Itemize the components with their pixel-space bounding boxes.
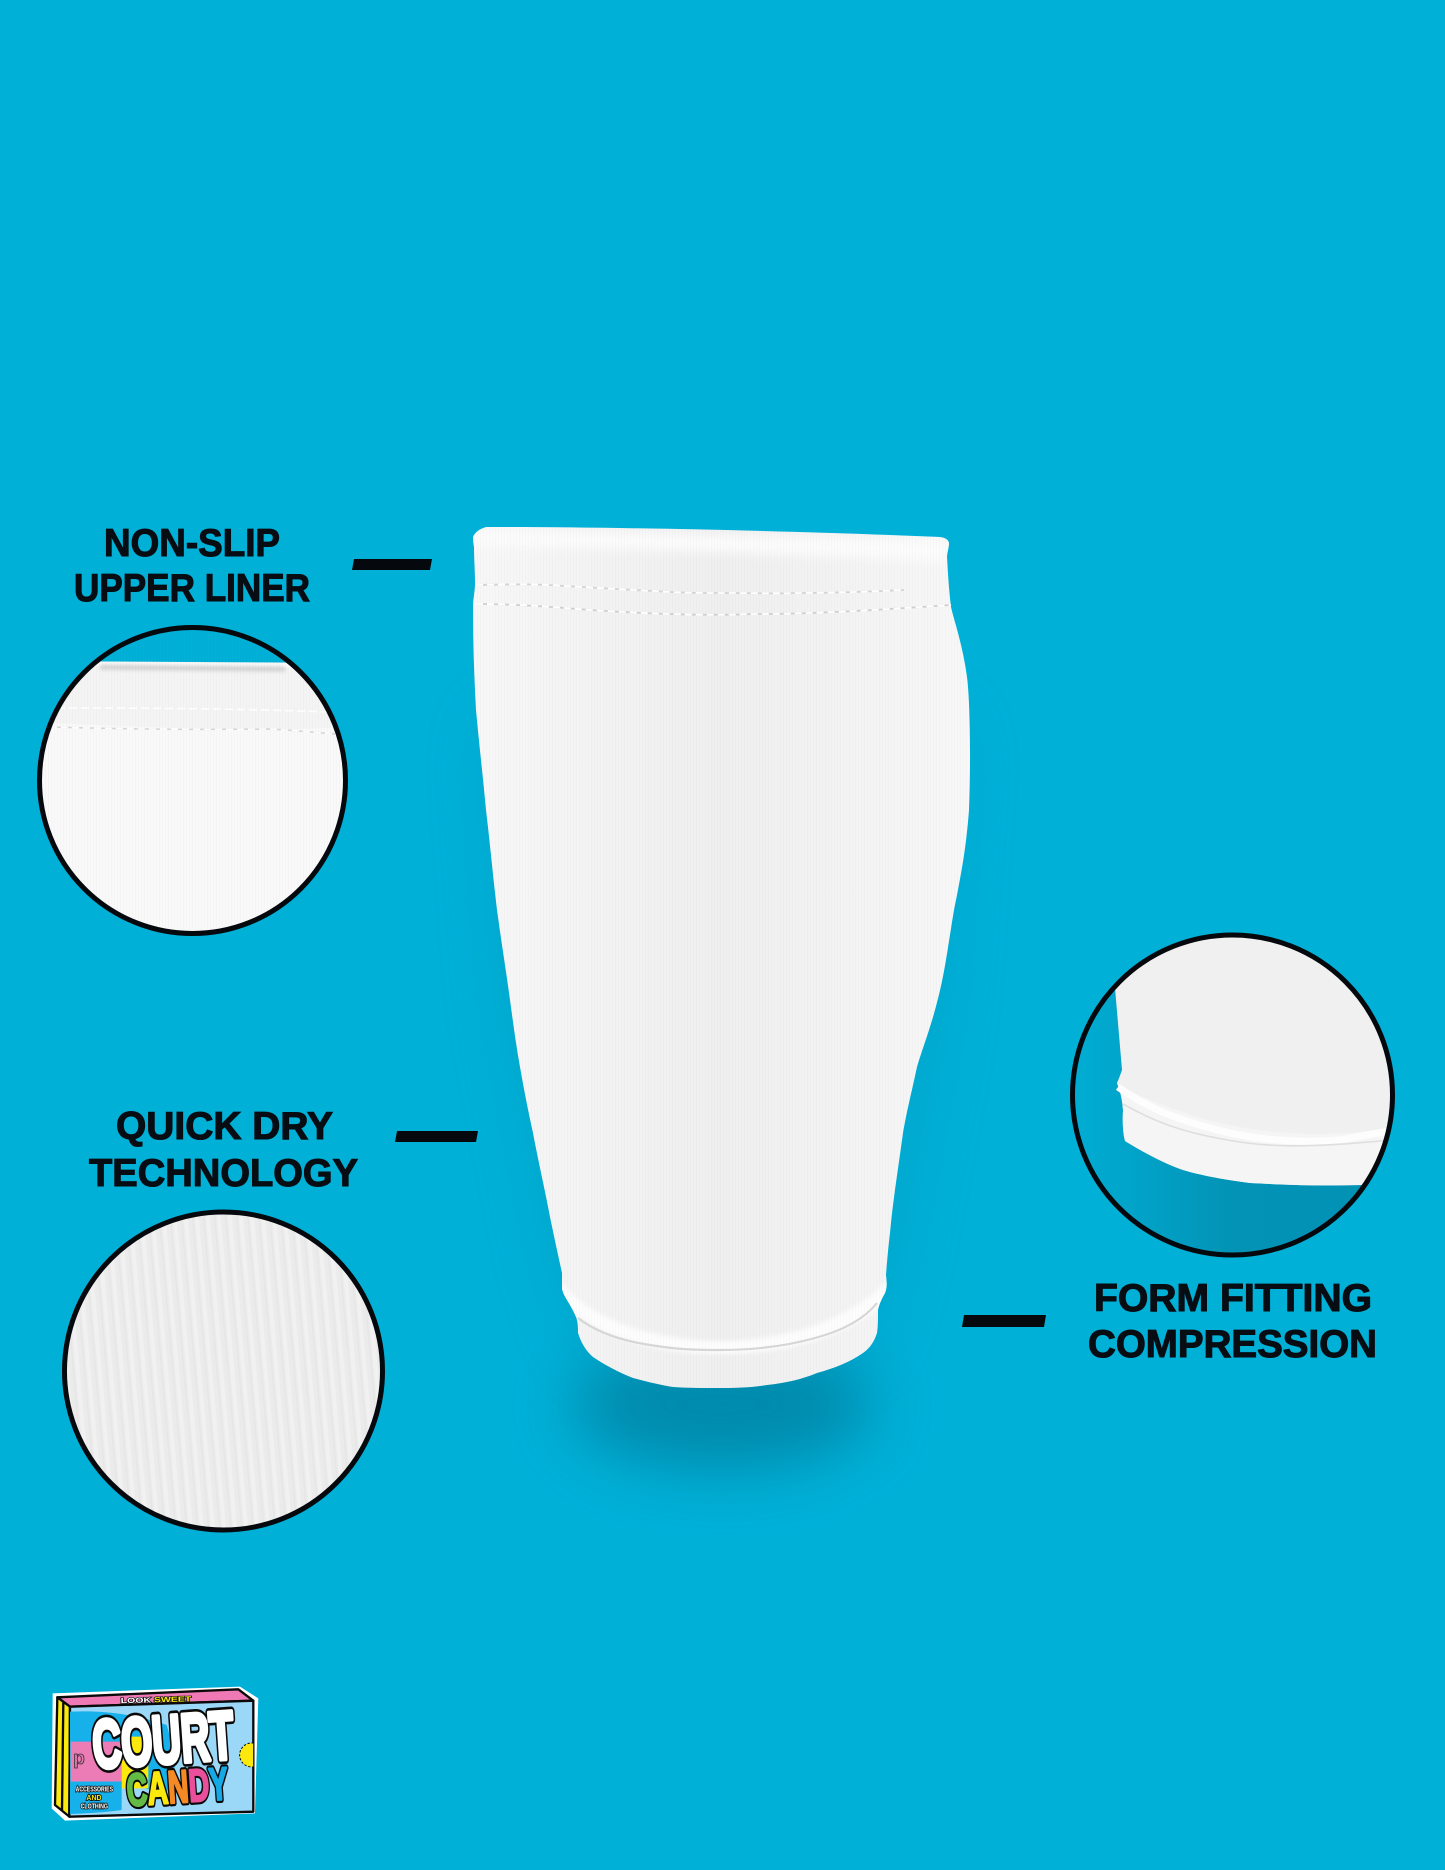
top cuff highlight xyxy=(470,530,950,562)
lower hem stitching xyxy=(578,1303,877,1350)
label: form fitting compression: COMPRESSION xyxy=(1088,1323,1377,1366)
pointer dash: non-slip upper liner xyxy=(352,559,432,570)
label: quick dry technology: TECHNOLOGY xyxy=(89,1152,358,1195)
pointer dash: form fitting compression xyxy=(962,1315,1046,1327)
logo wordmark candy: CANDY xyxy=(125,1757,230,1816)
logo small p: p xyxy=(73,1747,85,1768)
upper stitching xyxy=(476,584,951,1350)
logo small text accessories and clothing xyxy=(76,1786,113,1811)
logo tagline: LOOK SWEET xyxy=(121,1694,192,1705)
logo small text accessories and clothing: CLOTHING xyxy=(81,1804,108,1811)
pointer dash: quick dry technology xyxy=(395,1131,478,1142)
detail circle: form fitting hem xyxy=(1065,920,1400,1260)
infographic canvas xyxy=(37,527,1395,1821)
logo wordmark candy: CANDY xyxy=(125,1757,230,1816)
logo small text accessories and clothing: AND xyxy=(86,1795,102,1802)
logo small text accessories and clothing: ACCESSORIES xyxy=(76,1786,113,1793)
logo box front xyxy=(69,1701,264,1817)
label: non-slip upper liner: UPPER LINER xyxy=(74,567,310,610)
logo wordmark court: COURT xyxy=(90,1697,236,1783)
sleeve drop shadow xyxy=(490,720,955,1470)
label: form fitting compression: FORM FITTING xyxy=(1094,1277,1372,1320)
logo: Court Candy box xyxy=(52,1687,264,1821)
label: quick dry technology xyxy=(89,1105,358,1195)
detail circle: quick dry fabric xyxy=(60,1205,390,1535)
product: compression thigh sleeve xyxy=(460,520,980,1400)
logo box top xyxy=(57,1689,253,1707)
detail circle: upper liner xyxy=(37,625,348,936)
label: form fitting compression xyxy=(1088,1277,1377,1366)
logo sticker outline xyxy=(52,1687,258,1821)
hem fold highlight xyxy=(556,1278,892,1354)
label: non-slip upper liner xyxy=(74,522,310,610)
logo box side xyxy=(55,1697,70,1817)
logo wordmark court xyxy=(90,1697,236,1783)
logo wordmark court: COURT xyxy=(90,1697,236,1783)
label: non-slip upper liner: NON-SLIP xyxy=(104,522,280,565)
label: quick dry technology: QUICK DRY xyxy=(116,1105,333,1148)
